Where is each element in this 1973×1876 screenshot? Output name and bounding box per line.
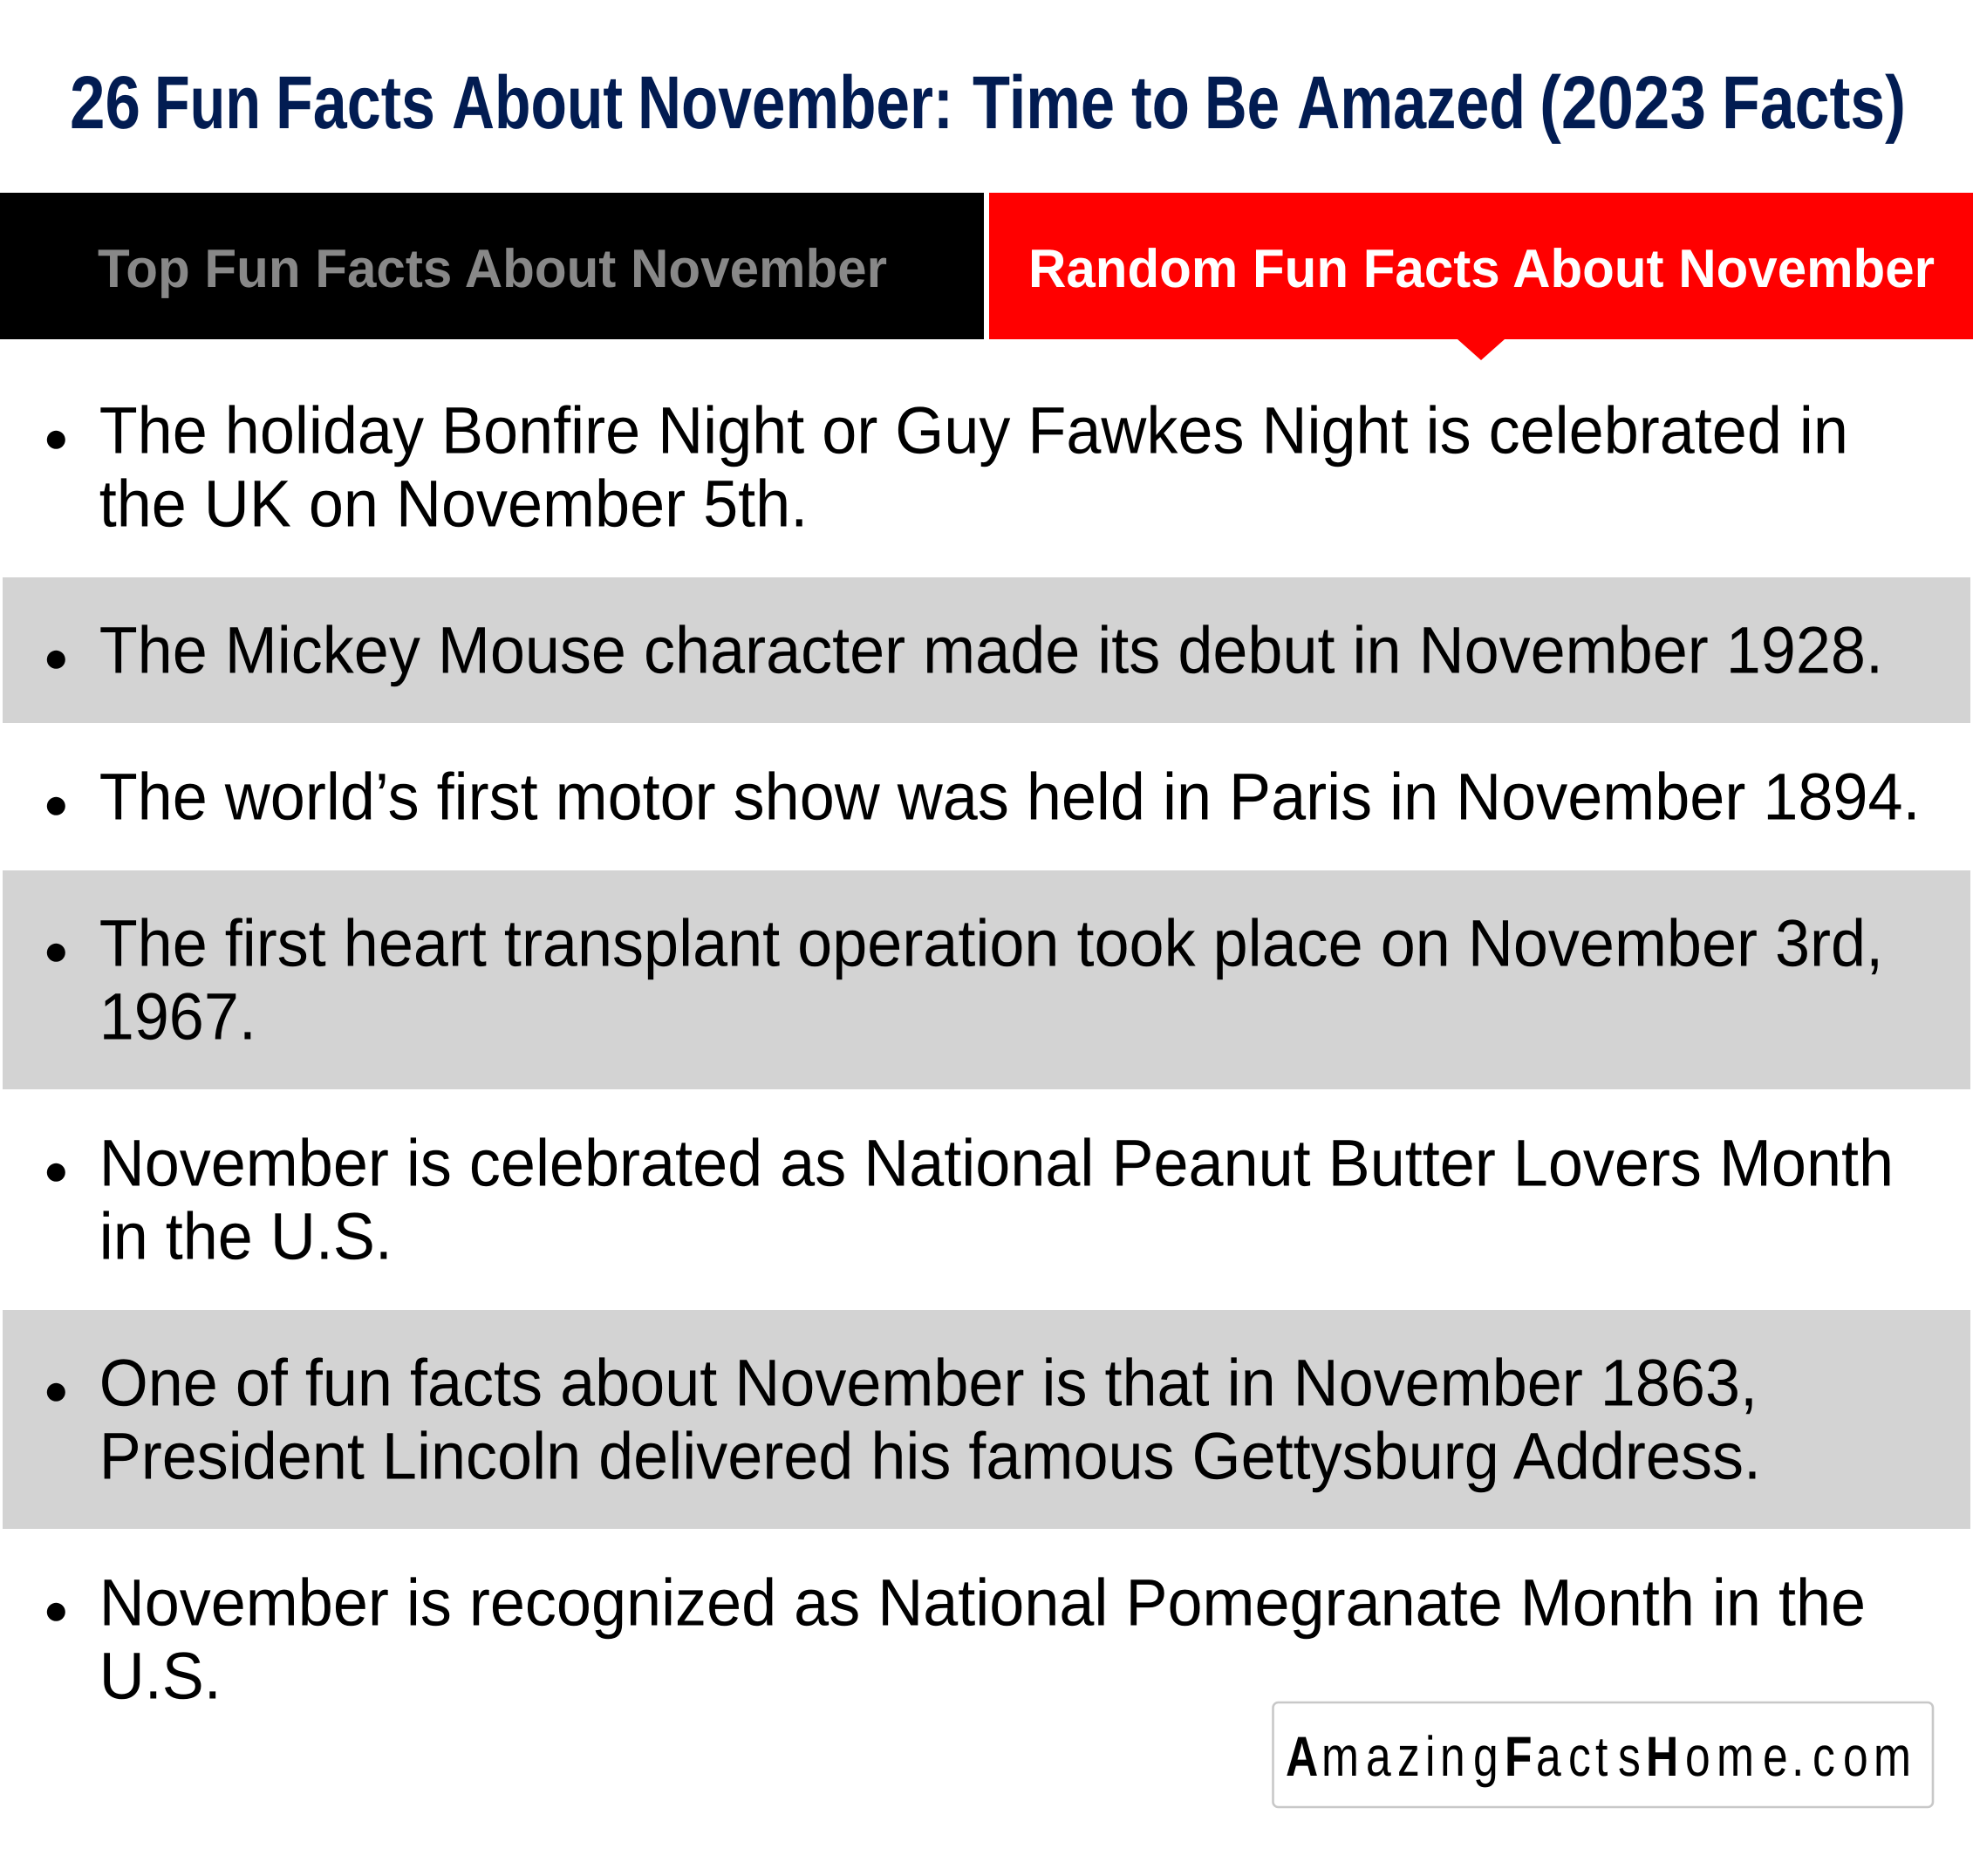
title: to [1131, 61, 1190, 145]
fact: Peanut Butter Lovers Month: in the U.S. [99, 1200, 393, 1273]
fact: Bonfire Night: The holiday Bonfire Night or Guy Fawkes Night is celebrated in [99, 394, 1848, 467]
fact: heart transplant: The first heart transplant operation took place on November 3rd, [99, 907, 1883, 980]
title: Fun [154, 61, 261, 145]
logo badge: AmazingFactsHome.com [1273, 1702, 1933, 1807]
fact: Bonfire Night [47, 394, 1848, 541]
fact: Gettysburg Address [3, 1310, 1970, 1529]
fact: Pomegranate Month [47, 1566, 1866, 1713]
fact: Bonfire Night: the UK on November 5th. [99, 467, 808, 541]
title: Amazed [1297, 61, 1526, 145]
fact: Gettysburg Address: President Lincoln delivered his famous Gettysburg Address. [99, 1420, 1761, 1493]
title: Facts) [1722, 61, 1906, 145]
logo badge: AmazingFactsHome.com: ome.com [1685, 1725, 1911, 1788]
logo badge: AmazingFactsHome.com: mazing [1321, 1725, 1499, 1788]
title: Be [1205, 61, 1280, 145]
fact: motor show: The world’s first motor show was held in Paris in November 1894. [99, 761, 1921, 834]
title: Time [973, 61, 1115, 145]
fact: Peanut Butter Lovers Month [47, 1127, 1894, 1273]
logo badge: AmazingFactsHome.com: acts [1536, 1725, 1641, 1788]
logo badge: AmazingFactsHome.com: H [1646, 1725, 1678, 1788]
tab: random fun facts (active) [989, 193, 1973, 360]
tab: random fun facts (active): Random Fun Facts About November [1028, 239, 1935, 299]
title [70, 61, 1906, 145]
tab: top fun facts [0, 193, 984, 339]
fact: Peanut Butter Lovers Month: November is celebrated as National Peanut Butter Lovers Month [99, 1127, 1894, 1200]
fact: Pomegranate Month: November is recognized as National Pomegranate Month in the [99, 1566, 1866, 1640]
fact: Mickey Mouse [3, 577, 1970, 723]
fact: Mickey Mouse: The Mickey Mouse character made its debut in November 1928. [99, 614, 1883, 687]
fact: heart transplant: 1967. [99, 980, 256, 1054]
tab: top fun facts: Top Fun Facts About November [98, 239, 887, 299]
fact: Gettysburg Address: One of fun facts about November is that in November 1863, [99, 1347, 1758, 1420]
fact: Pomegranate Month: U.S. [99, 1640, 222, 1713]
title: 26 [70, 61, 140, 145]
title: November: [638, 61, 953, 145]
fact: heart transplant [3, 870, 1970, 1089]
title: About [452, 61, 623, 145]
title: Facts [276, 61, 435, 145]
logo badge: AmazingFactsHome.com: A [1286, 1725, 1318, 1788]
title: (2023 [1539, 61, 1706, 145]
logo badge: AmazingFactsHome.com: F [1505, 1725, 1533, 1788]
